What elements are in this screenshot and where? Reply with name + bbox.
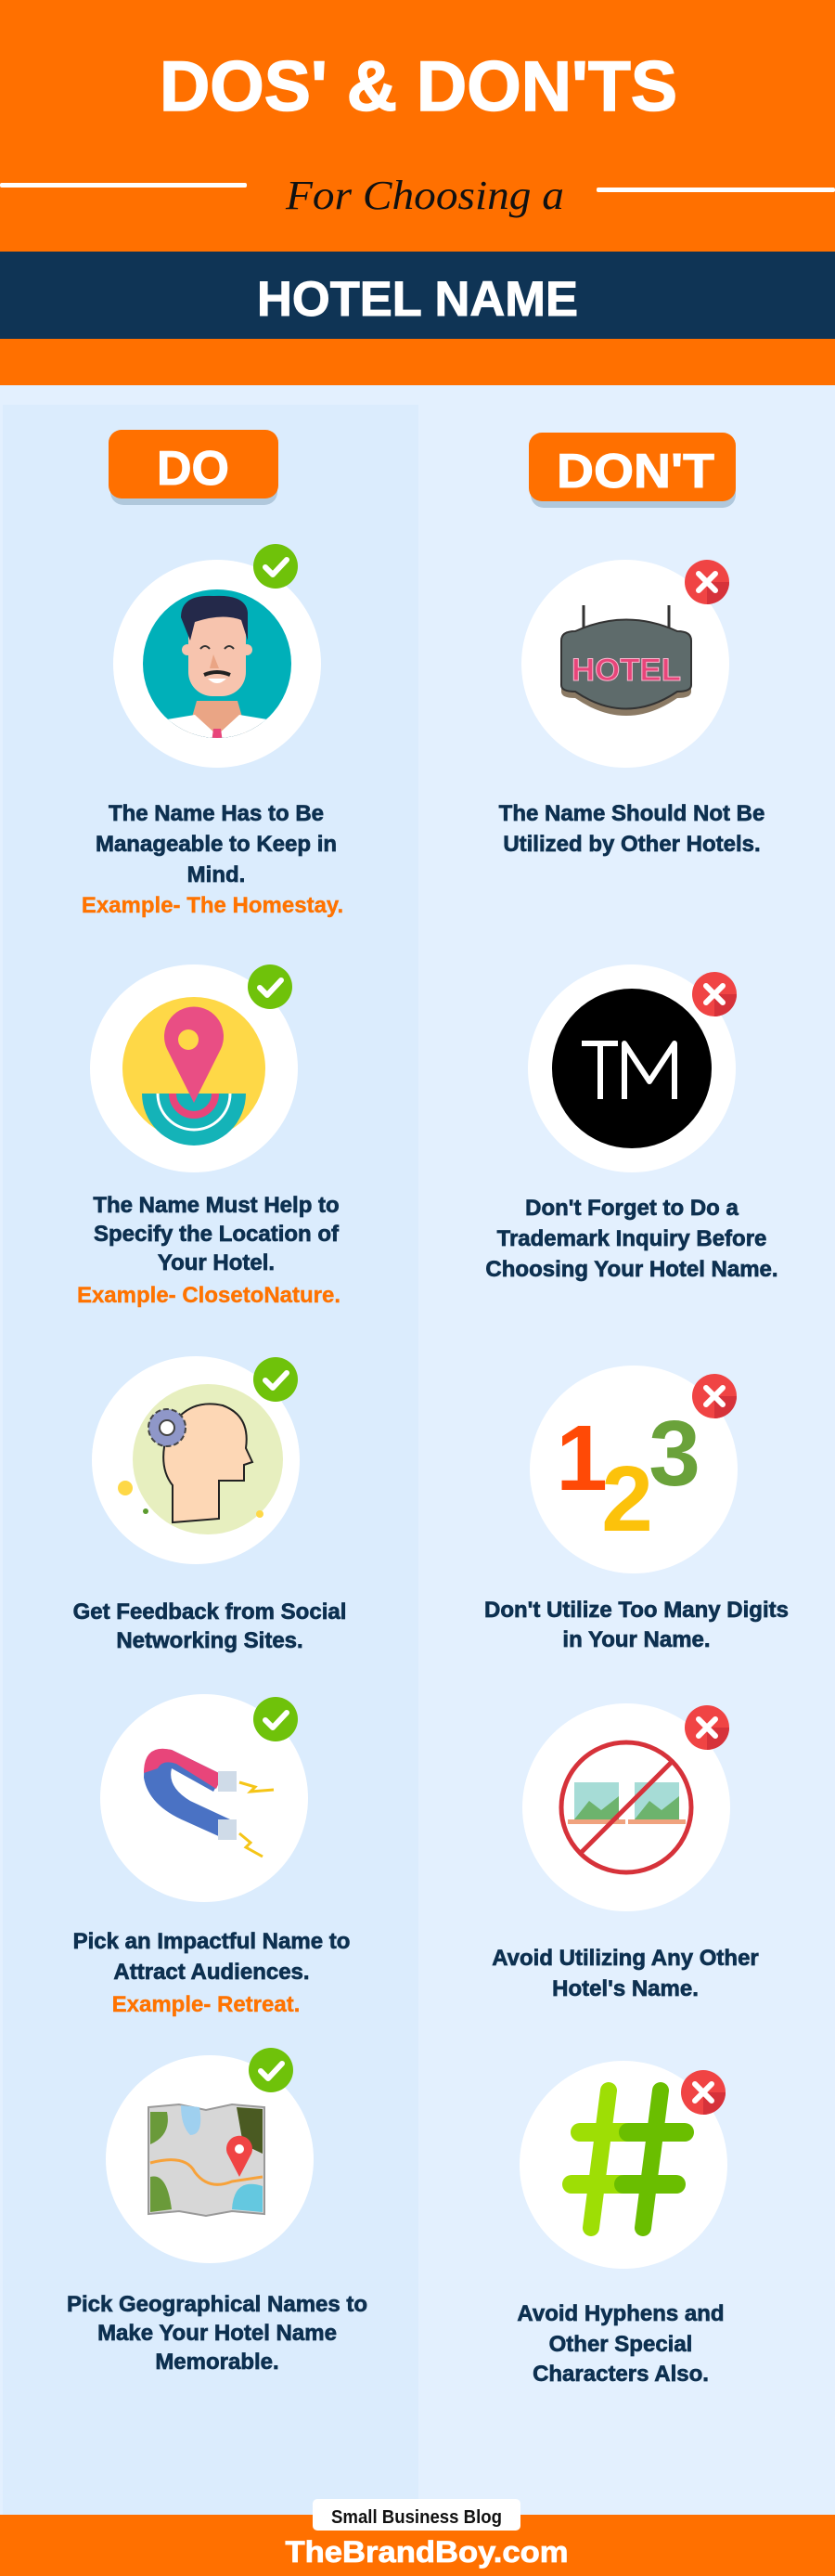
icon: 123: 2: [601, 1447, 653, 1551]
icon: 123: 1: [556, 1406, 608, 1510]
text: do 4: Pick an Impactful Name to: [73, 1929, 350, 1954]
text: do 4: Attract Audiences.: [113, 1960, 310, 1985]
badge: check 1: [253, 544, 298, 589]
badge: check 5: [249, 2048, 293, 2092]
badge: cross 2: [692, 972, 737, 1016]
text: do 3: Get Feedback from Social: [73, 1599, 346, 1625]
footer: Small Business Blog: [331, 2507, 502, 2528]
text: do 2: Example- ClosetoNature.: [77, 1283, 340, 1308]
subtitle: script line: For Choosing a: [285, 173, 564, 218]
text: do 5: Pick Geographical Names to: [67, 2292, 367, 2317]
text: do 5: Memorable.: [155, 2349, 279, 2375]
button: DON'T: DON'T: [557, 445, 714, 498]
text: dont 3: in Your Name.: [562, 1627, 711, 1652]
text: dont 4: Hotel's Name.: [552, 1976, 699, 2001]
text: dont 4: Avoid Utilizing Any Other: [492, 1946, 759, 1971]
text: do 4: Example- Retreat.: [112, 1992, 300, 2017]
badge: cross 4: [685, 1705, 729, 1750]
text: do 1: Example- The Homestay.: [82, 893, 343, 918]
footer: [0, 2499, 835, 2576]
text: dont 5: [517, 2301, 725, 2387]
text: dont 2: Choosing Your Hotel Name.: [485, 1257, 778, 1282]
icon: 123: 3: [649, 1402, 700, 1506]
subtitle: script line: [0, 173, 835, 218]
button: DO: [109, 430, 278, 505]
text: dont 1: [499, 801, 764, 857]
text: do 1: The Name Has to Be: [109, 801, 324, 826]
text: do 5: Make Your Hotel Name: [97, 2321, 337, 2346]
icon: no copying pictures: [522, 1703, 730, 1911]
text: dont 2: Trademark Inquiry Before: [497, 1226, 766, 1251]
text: do 2: Specify the Location of: [94, 1222, 340, 1247]
text: do 1: Manageable to Keep in: [96, 832, 337, 857]
icon: hotel sign: [521, 560, 729, 768]
text: dont 1: The Name Should Not Be: [499, 801, 764, 826]
text: do 4: [73, 1929, 350, 2017]
text: do 3: [73, 1599, 346, 1653]
text: dont 1: Utilized by Other Hotels.: [503, 832, 761, 857]
button: DON'T: [529, 433, 736, 508]
button: DO: DO: [157, 442, 229, 496]
icon: trademark: [528, 964, 736, 1172]
icon: magnet: [100, 1694, 308, 1902]
footer: TheBrandBoy.com: [286, 2535, 568, 2569]
title: DOS' & DON'TS: [160, 47, 677, 126]
badge: cross 3: [692, 1374, 737, 1418]
text: do 5: [67, 2292, 367, 2375]
icon: head with gear: [92, 1356, 300, 1564]
text: dont 3: [484, 1598, 789, 1652]
text: do 2: [77, 1193, 340, 1308]
icon: man avatar: [113, 560, 321, 768]
header band: [0, 0, 835, 385]
icon: location pin: [90, 964, 298, 1172]
text: dont 3: Don't Utilize Too Many Digits: [484, 1598, 789, 1623]
badge: check 4: [253, 1697, 298, 1741]
text: dont 5: Avoid Hyphens and: [517, 2301, 725, 2326]
icon: 123: [530, 1366, 738, 1573]
text: dont 2: [485, 1196, 778, 1282]
text: do 1: [82, 801, 343, 918]
heading: hotel name: HOTEL NAME: [257, 272, 578, 327]
text: dont 4: [492, 1946, 759, 2001]
text: do 2: The Name Must Help to: [93, 1193, 340, 1218]
text: dont 2: Don't Forget to Do a: [525, 1196, 739, 1221]
badge: cross 1: [685, 560, 729, 604]
text: do 2: Your Hotel.: [158, 1250, 275, 1275]
icon: map: [106, 2055, 314, 2263]
text: do 3: Networking Sites.: [116, 1628, 303, 1653]
badge: check 3: [253, 1357, 298, 1402]
icon: hashtag: [520, 2061, 727, 2269]
panel: do column: [3, 405, 418, 2515]
text: do 1: Mind.: [187, 862, 245, 887]
icon: hotel sign: HOTEL: [572, 653, 681, 688]
badge: check 2: [248, 964, 292, 1009]
text: dont 5: Other Special: [549, 2332, 692, 2357]
text: dont 5: Characters Also.: [533, 2362, 709, 2387]
badge: cross 5: [681, 2070, 726, 2115]
